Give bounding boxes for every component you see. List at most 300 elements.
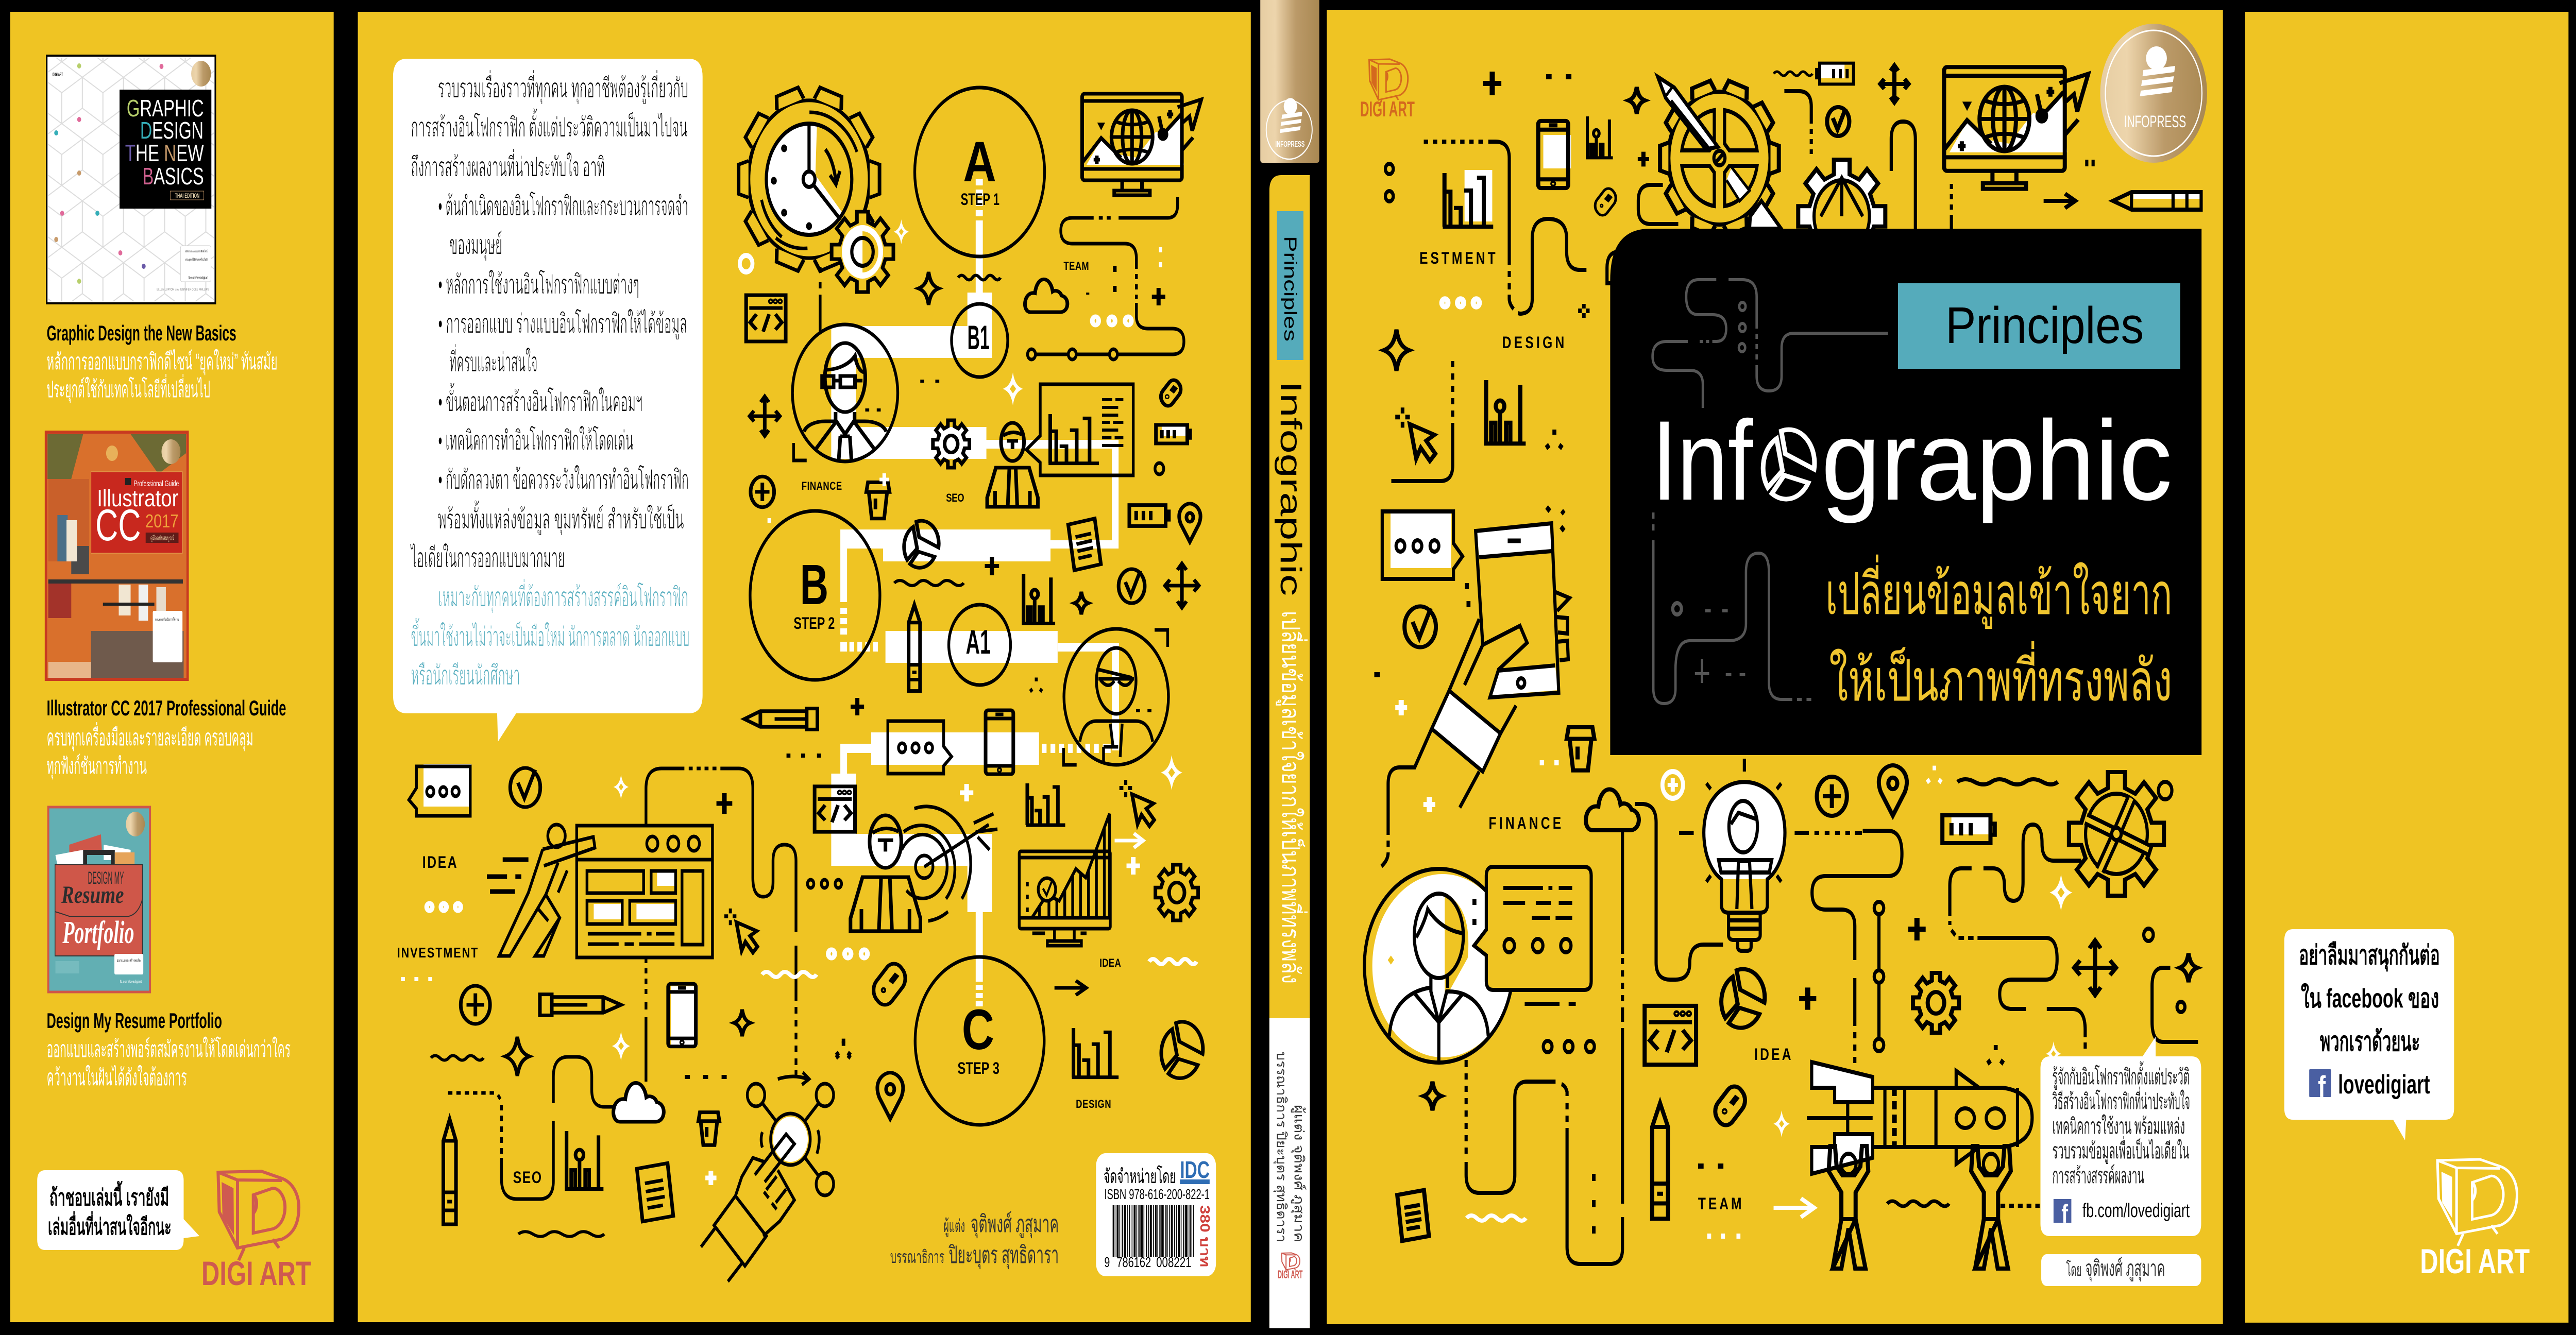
white connector bars xyxy=(831,179,1119,1006)
icon: cloud xyxy=(614,1083,664,1122)
speech box: description: • หลักการใช้งานอินโฟกราฟิกแบบต่างๆ xyxy=(438,269,639,299)
speech box: description xyxy=(393,59,703,742)
small squares xyxy=(1472,899,1477,925)
info box: รวบรวมข้อมูลเพื่อเป็นไอเดียใน xyxy=(2053,1136,2189,1164)
white dots xyxy=(1442,299,1479,307)
info box xyxy=(2041,1037,2201,1236)
icon: half gear xyxy=(1798,160,1885,273)
book cover: Graphic Design the New Basics: THE NEW xyxy=(125,140,204,166)
road xyxy=(1392,361,1453,481)
road nodes xyxy=(1027,349,1117,360)
small dashes xyxy=(685,1075,727,1079)
small dashes xyxy=(1136,709,1151,712)
speech box: description: พร้อมทั้งแหล่งข้อมูล ขุมทรัพย์ สำหรับใช้เป็น xyxy=(438,500,684,536)
circle B step 2: B xyxy=(800,553,828,617)
icon: phone xyxy=(668,984,698,1047)
barcode box: IDC xyxy=(1180,1157,1210,1183)
cross dots xyxy=(1029,678,1043,693)
book cover: Illustrator CC 2017: CC xyxy=(95,501,141,550)
icon: cursor xyxy=(724,909,757,952)
speech box: description: ไอเดียในการออกแบบมากมาย xyxy=(410,543,565,573)
icon: pin xyxy=(1879,765,1907,816)
label SEO: SEO xyxy=(513,1169,541,1187)
icon: white arrow xyxy=(1114,833,1143,848)
book cover: Design My Resume Portfolio: fb.com/lovedigiart xyxy=(120,980,142,984)
book title 1: Graphic Design the New Basics xyxy=(47,321,236,345)
icon: white sparkle xyxy=(1773,1110,1790,1137)
icon: mouse xyxy=(1158,376,1183,409)
icon: sparkle xyxy=(2180,953,2197,982)
panel: front cover xyxy=(1327,10,2223,1324)
speech bubble: facebook: f xyxy=(2318,1070,2326,1103)
book cover: Graphic Design the New Basics: ELLEN LUPTON และ JENNIFER COLE PHILLIPS xyxy=(157,288,209,292)
speech box: description: • ขั้นตอนการสร้างอินโฟกราฟิกในคอมฯ xyxy=(438,383,642,417)
speech bubble: more books: เล่มอื่นที่น่าสนใจอีกนะ xyxy=(48,1211,172,1240)
info box: รู้จักกับอินโฟกราฟิกตั้งแต่ประวัติ xyxy=(2053,1061,2190,1090)
wave xyxy=(1774,72,1812,76)
icon: cup xyxy=(699,1112,719,1145)
icon: plus xyxy=(851,698,864,715)
icon: white sparkle xyxy=(1003,372,1023,405)
circle A step 1: STEP 1 xyxy=(961,191,999,209)
speech box: description: หรือนักเรียนนักศึกษา xyxy=(411,660,520,690)
label ESTMENT: ESTMENT xyxy=(1419,249,1496,268)
small squares xyxy=(1374,505,1566,677)
label FINANCE: FINANCE xyxy=(1489,814,1561,833)
barcode box: 008221 xyxy=(1156,1254,1192,1271)
white spine footer xyxy=(1269,1018,1310,1328)
icon: gear xyxy=(1913,973,1959,1033)
white dots xyxy=(828,950,868,958)
road xyxy=(1635,804,1723,980)
label IDEA: IDEA xyxy=(1099,957,1121,970)
white squares xyxy=(1707,1234,1740,1239)
label TEAM: TEAM xyxy=(1063,260,1089,273)
corner mark xyxy=(793,443,807,460)
icon: plus xyxy=(1908,918,1926,940)
medal: infopress: INFOPRESS xyxy=(2124,113,2186,131)
icon: mouse xyxy=(1711,1082,1749,1130)
barcode box: 380 บาท xyxy=(1197,1205,1212,1267)
book cover: Graphic Design the New Basics: THAI EDITION xyxy=(175,193,199,199)
book cover: Design My Resume Portfolio: ออกแบบและสร้างพอร์ต xyxy=(117,958,141,963)
speech box: description: • เทคนิคการทำอินโฟกราฟิกให้โดดเด่น xyxy=(438,425,633,455)
small dashes xyxy=(1546,74,1571,79)
panel: back cover xyxy=(358,12,1251,1322)
book blurb 1: ประยุกต์ใช้กับเทคโนโลยีที่เปลี่ยนไป xyxy=(47,373,210,403)
icon: rocket team xyxy=(1807,1062,2032,1269)
black ring dots xyxy=(807,880,841,888)
icon: bar chart with pin xyxy=(1486,380,1526,443)
barcode box: 9 xyxy=(1105,1254,1110,1271)
spine logo xyxy=(1278,1253,1302,1281)
logo: DIGI ART orange: DIGI ART xyxy=(1360,97,1415,121)
icon: pin xyxy=(877,1073,903,1119)
icon: horizontal pencil xyxy=(744,709,818,729)
circle C step 3: C xyxy=(962,998,994,1062)
speech box: description: ขึ้นมาใช้งานไม่ว่าจะเป็นมือใหม่ นักการตลาด นักออกแบบ xyxy=(411,618,689,652)
icon: bar chart with pin xyxy=(1587,116,1613,158)
speech bubble: facebook: ใน facebook ของ xyxy=(2301,983,2439,1013)
small squares xyxy=(1592,1174,1596,1234)
teal label: Principles: Principles xyxy=(1945,296,2144,354)
book cover: Graphic Design the New Basics: หลักการออกแบบกราฟิกดีไซน์ xyxy=(185,249,208,253)
book cover: Graphic Design the New Basics: ประยุกต์ใช้กับเทคโนโลยี xyxy=(185,258,208,262)
book cover: Graphic Design the New Basics: GRAPHIC xyxy=(127,95,204,122)
book blurb 3: ออกแบบและสร้างพอร์ตสมัครงานให้โดดเด่นกว่าใคร xyxy=(47,1036,291,1062)
icon: pie xyxy=(904,521,939,568)
icon: sparkle xyxy=(734,1009,751,1036)
white cross dots xyxy=(1926,766,1943,784)
person circle 2 xyxy=(1064,629,1168,765)
panel: spine xyxy=(1260,0,1319,1328)
road from board xyxy=(646,768,796,1077)
road xyxy=(1607,185,1679,283)
dotted line xyxy=(2001,1204,2040,1208)
icon: cursor xyxy=(1395,407,1435,461)
icon: white arrow xyxy=(1774,1199,1814,1217)
icon: target person xyxy=(851,807,997,931)
person circle 1 xyxy=(792,324,897,461)
icon: plus xyxy=(1152,288,1165,305)
small squares xyxy=(2085,160,2095,166)
cross dots xyxy=(1986,1045,2005,1066)
white dots xyxy=(1092,317,1131,325)
circle C step 3 xyxy=(915,957,1044,1125)
icon: speech box xyxy=(1382,510,1463,579)
logo: DIGI ART red: DIGI ART xyxy=(201,1255,311,1293)
icon: gear xyxy=(933,420,970,468)
white dots xyxy=(427,903,461,911)
white wave xyxy=(762,972,817,977)
road lower left xyxy=(448,1057,616,1199)
label IDEA: IDEA xyxy=(1754,1046,1791,1064)
title: Infographic: Inf xyxy=(1652,397,1753,524)
icon: slider xyxy=(1874,902,1884,1051)
logo: DIGI ART white xyxy=(2420,1159,2530,1281)
info box: fb.com/lovedigiart xyxy=(2082,1200,2190,1222)
speech bubble: more books: ถ้าชอบเล่มนี้ เรายังมี xyxy=(49,1181,169,1210)
speech box: description: เหมาะกับทุกคนที่ต้องการสร้างสรรค์อินโฟกราฟิก xyxy=(438,578,688,614)
icon: big gear xyxy=(2069,772,2164,896)
book cover: Design My Resume Portfolio: Resume xyxy=(61,882,124,909)
icon: battery xyxy=(1942,814,1995,843)
spine editor credit: บรรณาธิการ ปิยะบุตร สุทธิดารา xyxy=(1273,1052,1289,1242)
panel: left flap xyxy=(10,12,334,1322)
icon: phone xyxy=(986,710,1013,774)
icon: plus circle xyxy=(1817,777,1847,816)
icon: bar chart xyxy=(1072,1028,1118,1077)
title: Infographic xyxy=(1652,397,2172,524)
book cover: Illustrator CC 2017: 2017 xyxy=(145,510,178,532)
wave xyxy=(431,1056,483,1060)
speech box: description: รวบรวมเรื่องราวที่ทุกคน ทุกอาชีพต้องรู้เกี่ยวกับ xyxy=(438,70,688,105)
icon: white ring xyxy=(740,255,753,272)
cross dots xyxy=(835,1041,852,1060)
window board with pusher xyxy=(487,825,713,957)
book cover: Graphic Design the New Basics: DESIGN xyxy=(140,117,204,144)
teal label: Principles xyxy=(1898,283,2180,369)
icon: white sparkle xyxy=(894,219,909,244)
book cover: Graphic Design the New Basics xyxy=(47,56,215,303)
spine author credit: ผู้แต่ง จุติพงศ์ ภูสุมาค xyxy=(1291,1105,1307,1242)
road xyxy=(1424,142,1586,314)
info box: f xyxy=(2061,1200,2068,1228)
icon: cursor xyxy=(1120,780,1154,826)
icon: bar chart with pin xyxy=(1024,574,1055,623)
icon: white plus circle xyxy=(1663,772,1683,798)
icon: mouse xyxy=(870,959,909,1010)
circle A step 1 xyxy=(915,88,1045,256)
icon: move arrows xyxy=(1880,65,1909,102)
label SEO: SEO xyxy=(946,492,964,505)
speech box: description: การสร้างอินโฟกราฟิก ตั้งแต่ประวัติความเป็นมาไปจน xyxy=(411,108,688,142)
icon: document xyxy=(1397,1190,1429,1241)
logo: DIGI ART red xyxy=(201,1171,311,1293)
label INVESTMENT: INVESTMENT xyxy=(397,945,478,961)
small squares xyxy=(865,266,1116,412)
info box: การสร้างสรรค์ผลงาน xyxy=(2053,1163,2144,1188)
label DESIGN: DESIGN xyxy=(1502,334,1564,352)
icon: sparkle xyxy=(919,272,939,305)
book blurb 3: คว้างานในฝันได้ดังใจต้องการ xyxy=(47,1065,187,1090)
speech bubble: facebook xyxy=(2284,929,2454,1140)
icon: sparkle xyxy=(1384,330,1409,371)
icon: move arrows xyxy=(750,397,780,436)
logo: DIGI ART white: DIGI ART xyxy=(2420,1241,2530,1281)
speech box: description: ของมนุษย์ xyxy=(449,230,502,262)
speech box: description: ที่ครบและน่าสนใจ xyxy=(449,344,537,377)
speech bubble icon xyxy=(409,764,471,816)
circle C step 3: STEP 3 xyxy=(957,1059,999,1078)
grey line art xyxy=(1653,280,1888,704)
white squares xyxy=(1540,760,1559,765)
white wave xyxy=(1467,1216,1526,1221)
circle A1: A1 xyxy=(966,624,991,661)
icon: bar chart with pin xyxy=(567,1131,603,1189)
speech box: description: • กับดักลวงตา ข้อควรระวังในการทำอินโฟกราฟิก xyxy=(438,465,689,494)
small dashes xyxy=(787,754,821,758)
book cover: Design My Resume Portfolio xyxy=(48,807,150,992)
rings xyxy=(1385,164,1393,201)
book blurb 1 xyxy=(47,349,278,403)
icon: horizontal pencil xyxy=(540,995,621,1015)
author box: จุติพงศ์ ภูสุมาค xyxy=(2085,1256,2165,1281)
icon: check xyxy=(1118,569,1145,603)
book blurb 2 xyxy=(47,722,253,780)
icon: small gear on clock xyxy=(832,212,893,292)
info box: วิธีสร้างอินโฟกราฟิกที่น่าประทับใจ xyxy=(2053,1086,2190,1114)
white squares xyxy=(401,977,432,981)
icons: white plus pair xyxy=(1395,700,1435,812)
icon: sparkle xyxy=(505,1037,530,1076)
label TEAM: TEAM xyxy=(1698,1195,1741,1213)
icon: cloud xyxy=(1586,789,1639,830)
icon: pin xyxy=(1179,504,1200,542)
subtitle xyxy=(1825,554,2172,713)
icon: horizontal pencil xyxy=(2113,191,2201,210)
icon: check xyxy=(510,768,540,807)
panel: black title block xyxy=(1610,229,2201,755)
small dashes xyxy=(1698,1163,1723,1169)
logo: DIGI ART orange xyxy=(1360,59,1415,121)
icon: sparkle xyxy=(1423,1082,1442,1110)
icon: ring xyxy=(2158,782,2172,799)
circle B step 2 xyxy=(750,511,880,680)
connector from clock gear to person xyxy=(818,267,822,333)
speech bubble: facebook: lovedigiart xyxy=(2338,1069,2430,1099)
barcode box: 786162 xyxy=(1116,1254,1151,1271)
icon: clock gear xyxy=(739,87,879,272)
spine teal label xyxy=(1277,211,1303,360)
circle B1: B1 xyxy=(968,319,990,357)
icon: white plus xyxy=(1127,857,1140,875)
title: Infographic: graphic xyxy=(1821,397,2172,524)
icon: white sparkle xyxy=(2046,1041,2061,1066)
book blurb 2: ครบทุกเครื่องมือและรายละเอียด ครอบคลุม xyxy=(47,722,253,751)
wave xyxy=(518,1231,604,1237)
spine teal label: Principles xyxy=(1280,236,1300,341)
icon: white sparkle xyxy=(614,775,629,799)
author credits: ปิยะบุตร สุทธิดารา xyxy=(948,1242,1059,1269)
icon: plus xyxy=(717,793,732,814)
icon: code window xyxy=(746,295,786,341)
book cover: Illustrator CC 2017: คู่มือฉบับสมบูรณ์ xyxy=(150,534,174,542)
icon: cup xyxy=(1567,727,1595,771)
icon: bulb person xyxy=(1679,759,1862,951)
info box: เทคนิคการใช้งาน พร้อมแหล่ง xyxy=(2053,1114,2185,1138)
icon: check xyxy=(1827,107,1849,136)
icon: arrow xyxy=(2044,194,2075,208)
icon: plus xyxy=(1638,152,1649,166)
icon: monitor globe xyxy=(1082,94,1201,195)
cross dots xyxy=(835,1039,852,1057)
icon: ring xyxy=(2177,1002,2185,1012)
white wave xyxy=(1149,959,1196,964)
book cover: Illustrator CC 2017: ครบทุกเครื่องมือการใช้งาน xyxy=(155,617,179,622)
icon: white plus xyxy=(705,1171,717,1185)
wave xyxy=(1887,1201,1949,1206)
icon: bar chart xyxy=(1443,170,1493,227)
gold spine top xyxy=(1260,0,1319,163)
icon: white sparkle xyxy=(1161,755,1182,790)
icon: arrow xyxy=(1055,981,1086,995)
big person circle with speech board xyxy=(1364,867,1591,1064)
cross dots xyxy=(1578,304,1589,318)
icon: cup xyxy=(866,473,890,519)
icon: plus xyxy=(985,557,999,575)
book cover: Design My Resume Portfolio: DESIGN MY xyxy=(88,869,124,888)
icon: code window xyxy=(815,786,855,832)
line to cloud xyxy=(644,958,648,1082)
author credits xyxy=(890,1211,1059,1269)
dash line xyxy=(1524,1002,1576,1006)
book cover: Design My Resume Portfolio: Portfolio xyxy=(62,915,134,950)
icon: vertical pencil xyxy=(1652,1103,1668,1219)
road xyxy=(1812,831,1902,1063)
book cover: Illustrator CC 2017 xyxy=(46,432,188,679)
book cover: Illustrator CC 2017: Professional Guide xyxy=(134,480,179,488)
author credits: ผู้แต่ง xyxy=(944,1217,965,1237)
barcode box: ISBN 978-616-200-822-1 xyxy=(1105,1186,1210,1203)
icon: ring xyxy=(2144,929,2153,941)
circle B1 xyxy=(952,304,1008,377)
panel: right flap xyxy=(2245,12,2568,1323)
icon: plus xyxy=(1799,987,1816,1010)
wave xyxy=(1957,779,2058,784)
speech bubble: facebook: พวกเราด้วยนะ xyxy=(2320,1026,2420,1056)
speech bubble: facebook: อย่าลืมมาสนุกกันต่อ xyxy=(2299,940,2440,972)
icon: gear xyxy=(1156,865,1198,920)
circle A1 xyxy=(949,605,1010,685)
speech box: description: ถึงการสร้างผลงานที่น่าประทับใจ อาทิ xyxy=(411,148,605,182)
book cover: Graphic Design the New Basics: BASICS xyxy=(143,163,204,190)
author box xyxy=(2041,1254,2201,1286)
icon: white sparkle xyxy=(2049,874,2073,911)
icon: speech box xyxy=(888,721,952,774)
medal: infopress xyxy=(2100,24,2207,163)
icon: bar chart xyxy=(1026,783,1065,825)
subtitle: เปลี่ยนข้อมูลเข้าใจยาก xyxy=(1825,554,2172,629)
cross dots xyxy=(1545,430,1564,450)
label DESIGN: DESIGN xyxy=(1076,1098,1111,1111)
road to gear xyxy=(1950,825,2085,1049)
icon: gear with pencil xyxy=(1658,77,1781,236)
icon: check xyxy=(1404,606,1436,647)
book title 3: Design My Resume Portfolio xyxy=(47,1008,222,1033)
icon: vertical pencil xyxy=(443,1119,456,1224)
speech box: description: • ต้นกำเนิดของอินโฟกราฟิกและกระบวนการจดจำ xyxy=(438,191,688,221)
label IDEA: IDEA xyxy=(422,853,457,872)
yellow spine body xyxy=(1269,175,1310,1328)
icon: code window xyxy=(1645,1006,1696,1065)
spine logo: DIGI ART xyxy=(1278,1269,1302,1281)
spine title: Infographic xyxy=(1274,381,1308,596)
icon: battery xyxy=(1817,63,1854,84)
barcode box: จัดจำหน่ายโดย xyxy=(1104,1165,1176,1188)
icon: white plus xyxy=(960,784,973,801)
icon: sparkle xyxy=(1074,592,1088,614)
book title 2: Illustrator CC 2017 Professional Guide xyxy=(47,696,286,720)
subtitle: ให้เป็นภาพที่ทรงพลัง xyxy=(1829,641,2172,713)
corner mark xyxy=(1063,748,1077,765)
icon: cloud xyxy=(1025,279,1067,312)
icon: document xyxy=(1068,519,1101,570)
white squares xyxy=(768,247,1162,523)
road line top right xyxy=(1031,197,1184,354)
speech bubble: more books xyxy=(37,1170,199,1250)
road xyxy=(1784,91,1811,154)
long road xyxy=(1466,831,1622,1264)
icon: plus xyxy=(1483,72,1501,95)
monitor top right and road xyxy=(1891,67,2088,229)
road xyxy=(2152,968,2198,1042)
icon: move arrows xyxy=(1165,563,1199,608)
icon: phone xyxy=(1538,121,1571,188)
wave xyxy=(894,580,964,586)
icon: sparkle xyxy=(1629,87,1645,114)
gold spine top: INFOPRESS xyxy=(1275,140,1304,149)
author credits: จุติพงศ์ ภูสุมาค xyxy=(971,1211,1059,1238)
author credits: บรรณาธิการ xyxy=(890,1248,944,1267)
book cover: Graphic Design the New Basics: fb.com/lovedigiart xyxy=(189,277,209,280)
icon: pie xyxy=(1161,1022,1203,1078)
corner mark xyxy=(1155,630,1167,647)
circle B step 2: STEP 2 xyxy=(793,614,835,633)
icon: document xyxy=(637,1163,673,1222)
label FINANCE: FINANCE xyxy=(802,480,842,493)
wave xyxy=(958,275,1001,280)
